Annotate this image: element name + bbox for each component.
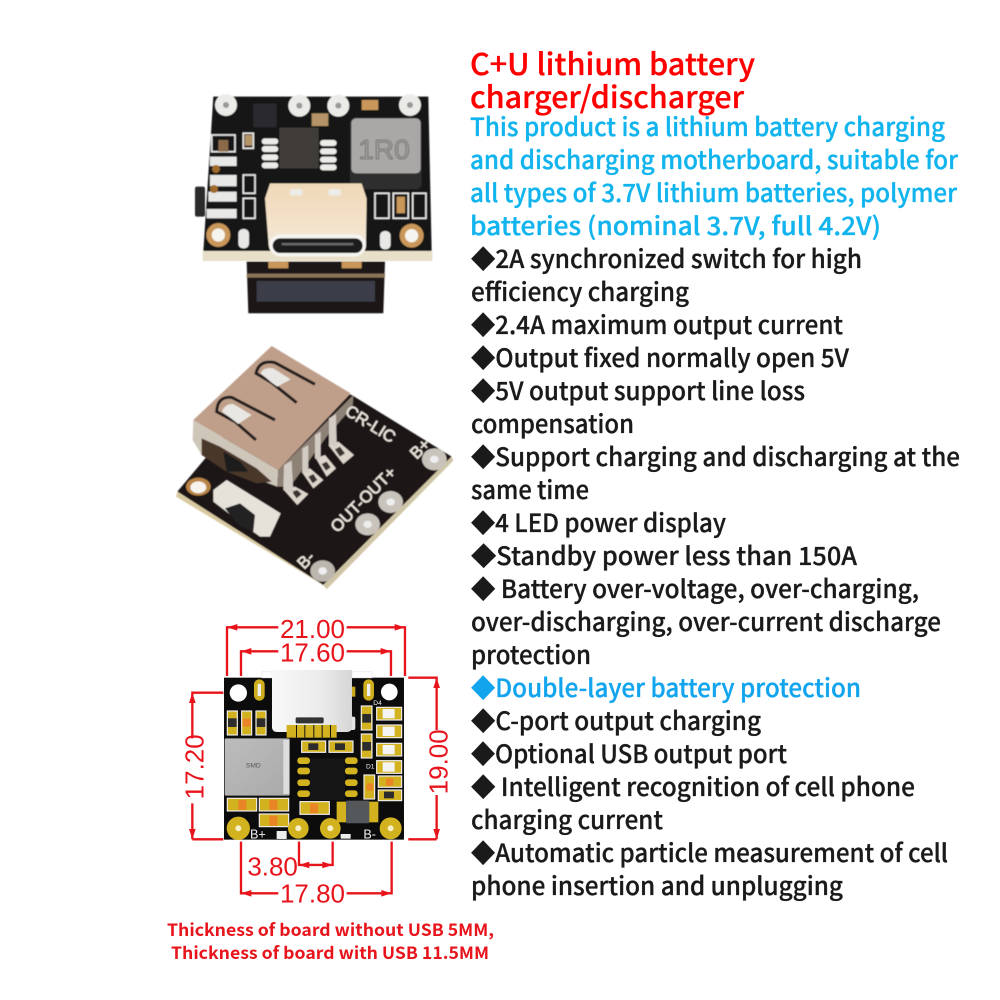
feature list: over-discharging, over-current discharge [471,603,941,639]
silkscreen labels: CR-LIC [342,401,399,447]
photo: top view of charger board [195,94,432,313]
photo: angled view with USB port [176,346,453,589]
feature list: ◆4 LED power display [471,504,726,540]
dimension numbers: 17.20 [179,734,209,799]
feature list: phone insertion and unplugging [471,867,844,903]
feature list: ◆2A synchronized switch for high [471,240,862,276]
dimension numbers: 17.60 [280,638,345,668]
dimension numbers [179,614,453,909]
dimension numbers: 3.80 [247,851,298,881]
silkscreen labels: B- [363,828,376,842]
intro text block: and discharging motherboard, suitable for [470,141,959,177]
feature list: ◆ Intelligent recognition of cell phone [471,768,915,804]
caption: board thickness: Thickness of board without USB 5MM, [167,916,494,941]
label: 1R0: 1R0 [358,134,410,165]
feature list: ◆Support charging and discharging at the [471,438,960,474]
feature list: ◆ Battery over-voltage, over-charging, [471,570,919,606]
feature list: ◆Standby power less than 150A [471,537,857,573]
silkscreen labels: B+ [406,435,434,463]
dimension numbers: 17.80 [280,879,345,909]
silkscreen labels: OUT-OUT+ [327,463,400,536]
red dimension lines [192,627,437,893]
label: SMD: SMD [246,762,261,769]
feature list: ◆Optional USB output port [471,735,787,771]
feature list: ◆Output fixed normally open 5V [471,339,849,375]
intro text block: batteries (nominal 3.7V, full 4.2V) [470,207,881,243]
feature list: ◆C-port output charging [471,702,762,738]
intro text block [470,108,959,243]
dimension numbers: 19.00 [423,729,453,794]
feature list: ◆2.4A maximum output current [471,306,843,342]
feature list: ◆Double-layer battery protection [471,669,861,705]
caption: board thickness [167,916,494,964]
silkscreen labels: D4 [373,700,382,707]
silkscreen labels [250,700,382,842]
silkscreen labels: D1 [366,764,375,771]
feature list: charging current [471,801,663,837]
caption: board thickness: Thickness of board with USB 11.5MM [171,939,489,964]
silkscreen labels: B- [293,548,319,573]
feature list: ◆5V output support line loss [471,372,805,408]
intro text block: This product is a lithium battery charging [470,108,946,144]
title: C+U lithium battery [470,40,755,84]
feature list: protection [471,636,591,672]
title [470,40,755,117]
title: charger/discharger [470,73,745,117]
silkscreen labels [293,401,434,573]
feature list: ◆Automatic particle measurement of cell [471,834,948,870]
feature list: compensation [471,405,634,441]
dimension numbers: 21.00 [280,614,345,644]
intro text block: all types of 3.7V lithium batteries, polymer [470,174,958,210]
dimensioned board diagram [179,614,453,909]
feature list: efficiency charging [471,273,690,309]
silkscreen labels: B+ [250,828,266,842]
feature list: same time [471,471,589,507]
feature list [471,240,960,903]
